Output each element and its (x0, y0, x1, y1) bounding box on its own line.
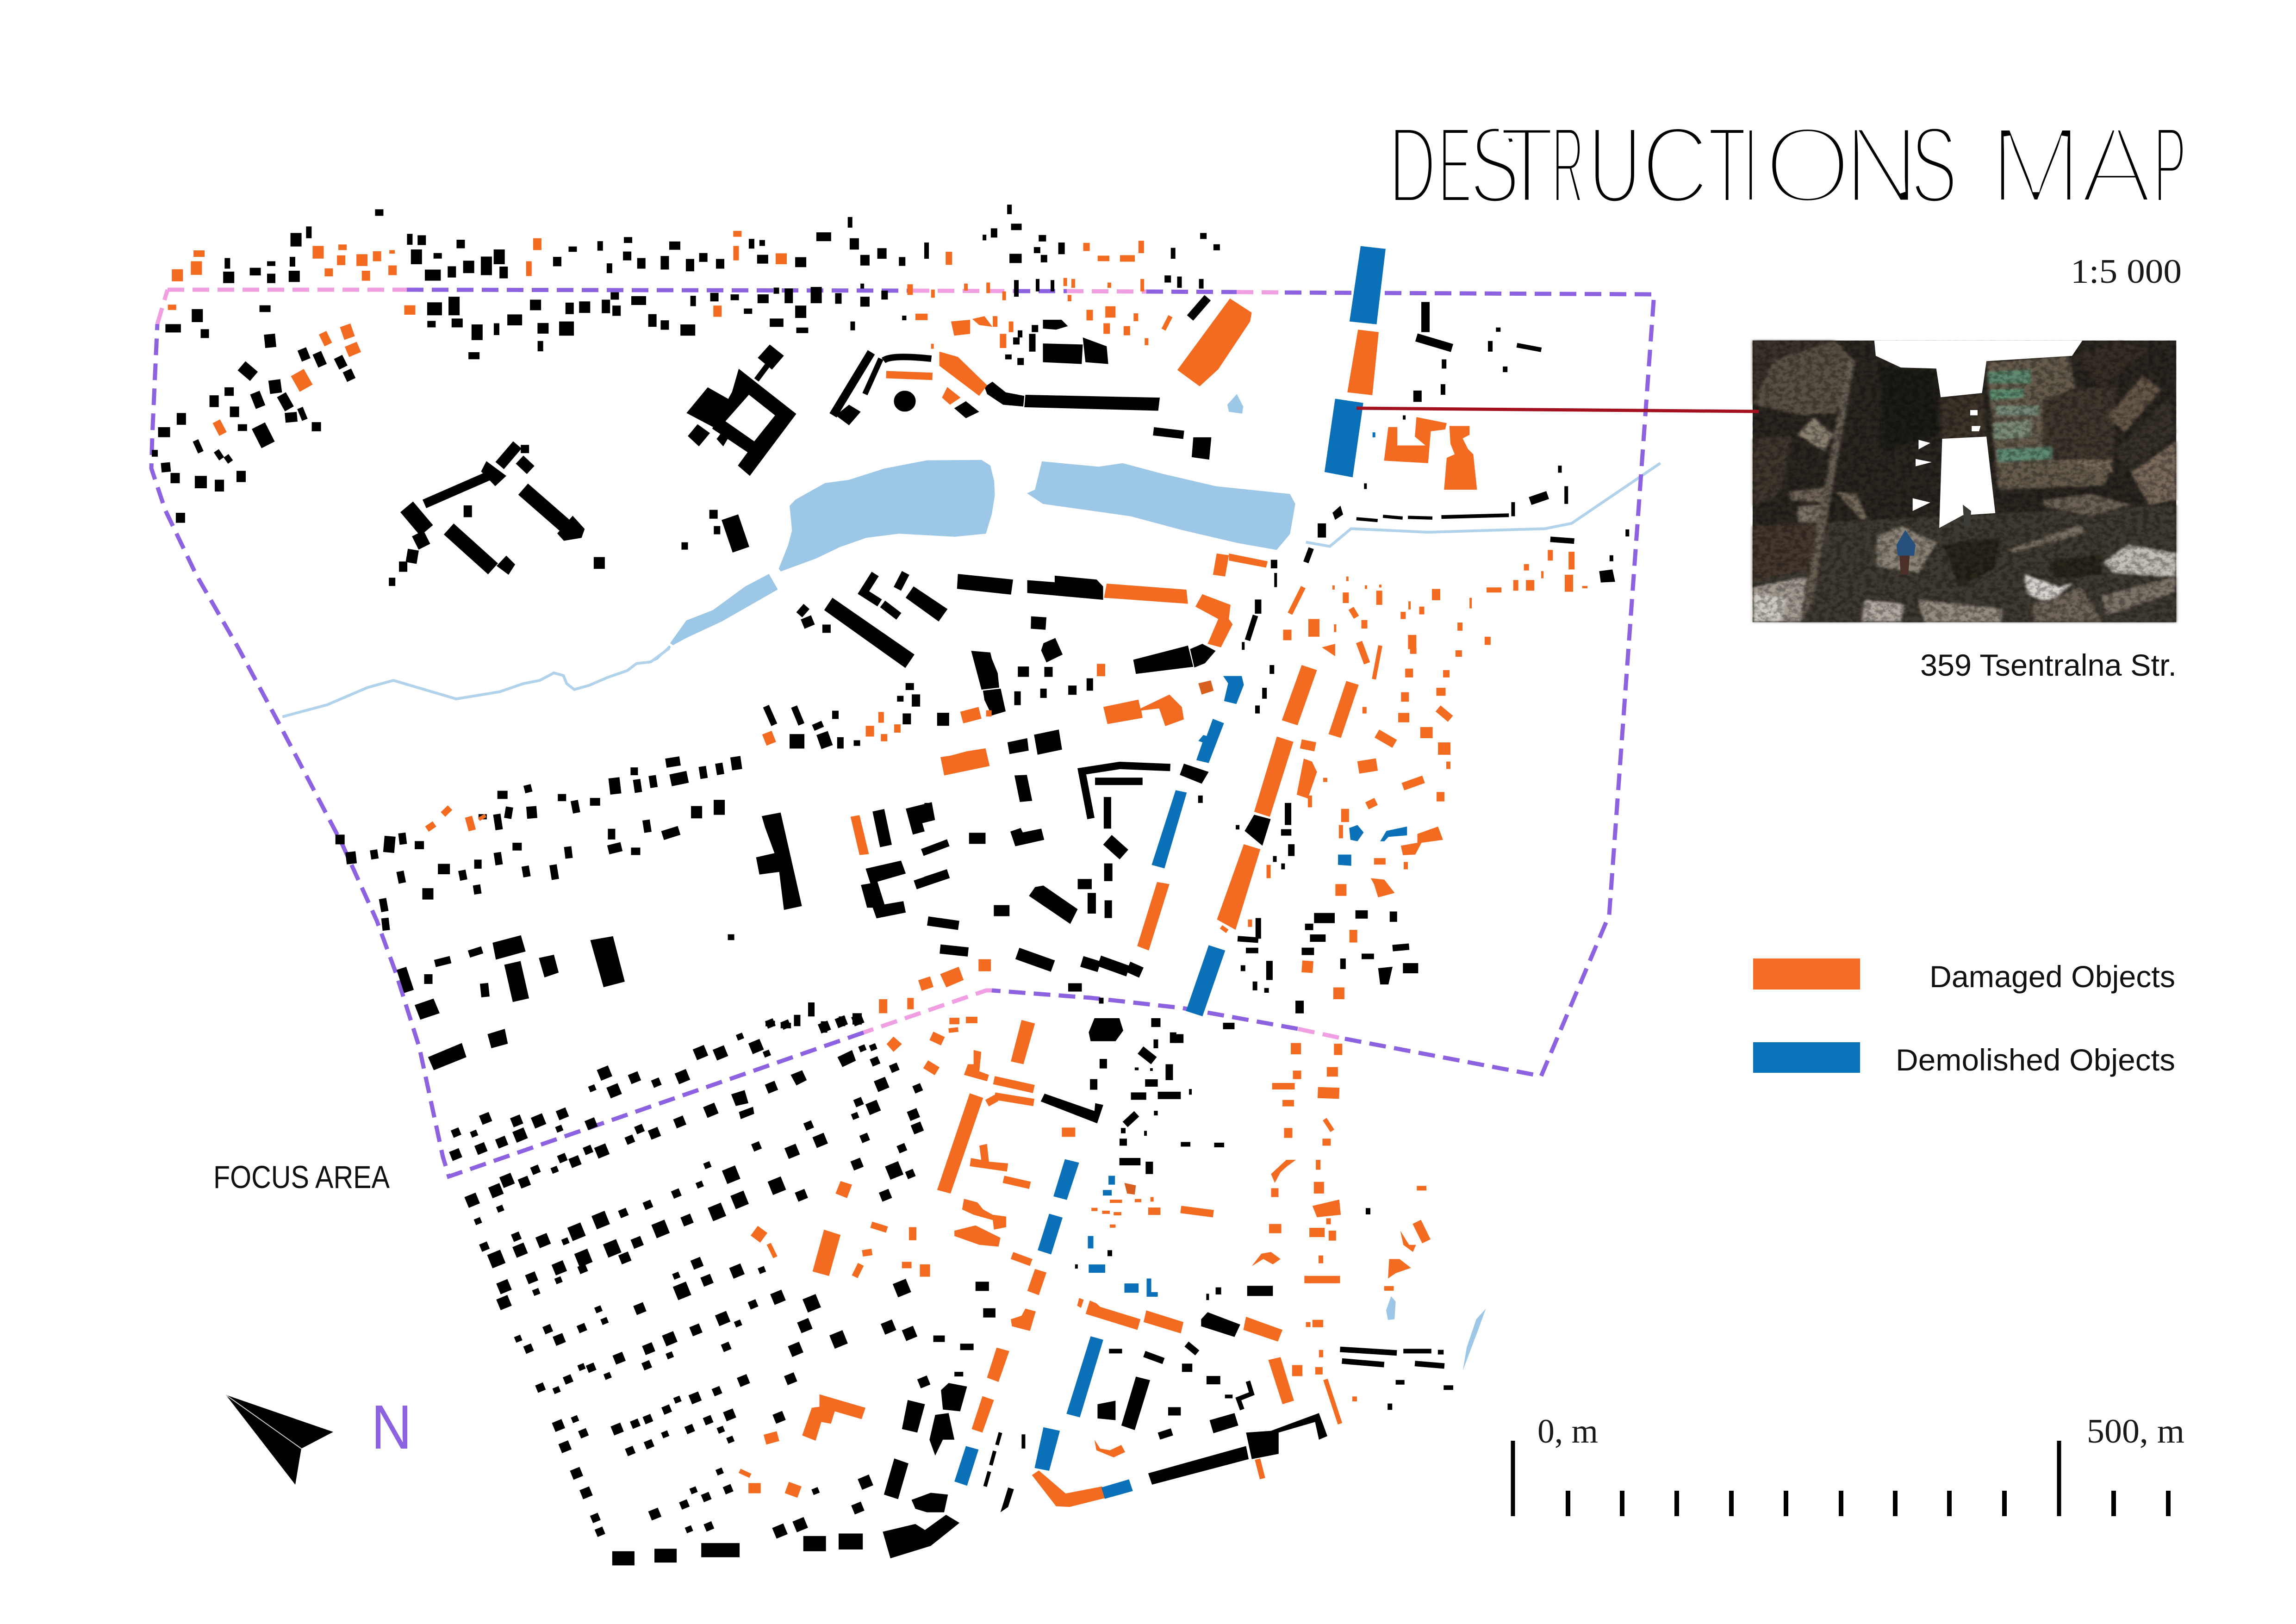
large orange blocks (940, 299, 1477, 656)
buildings: south-west of centre (340, 757, 948, 1033)
black houses north (838, 205, 1541, 402)
black houses: small (471, 1035, 876, 1531)
title: T (1499, 104, 1555, 226)
orange houses (427, 808, 932, 1013)
black blocks (766, 573, 1103, 755)
title: C (1641, 104, 1709, 226)
damaged houses (926, 1020, 1426, 1479)
church complex (392, 445, 741, 586)
north label: N (371, 1392, 412, 1462)
legend label: demolished: Demolished Objects (1896, 1043, 2175, 1077)
orange houses (767, 664, 1101, 744)
hospital complex (686, 344, 796, 476)
scale bar (1513, 1412, 2184, 1516)
water: lakes and river (282, 394, 1660, 1370)
damaged houses (978, 648, 1459, 999)
title: D (1388, 104, 1437, 226)
title: R (1552, 104, 1584, 226)
title: P (2153, 104, 2186, 226)
black houses (340, 757, 948, 1033)
legend swatch: demolished (1753, 1042, 1860, 1073)
black houses north row (165, 209, 824, 359)
leader line from building to photo (1356, 408, 1759, 411)
black houses: medium-small (452, 1022, 921, 1533)
buildings: southern residential blocks (428, 1018, 959, 1565)
title: A (2080, 104, 2152, 226)
orange houses north row (172, 231, 781, 434)
orange scatter east (1288, 550, 1587, 679)
scale label: zero: 0, m (1537, 1412, 1598, 1450)
legend swatch: damaged (1753, 958, 1860, 989)
title: O (1763, 104, 1852, 226)
title (1388, 110, 2180, 220)
legend label: damaged: Damaged Objects (1929, 959, 2175, 994)
orange houses (740, 1037, 925, 1492)
black houses: medium (451, 1018, 928, 1516)
black row along the east river (1133, 415, 1627, 674)
damaged blocks (940, 665, 1443, 987)
damaged blocks (937, 1020, 1416, 1507)
title: S (1910, 104, 1958, 226)
title: M (1989, 104, 2083, 226)
black blocks (926, 665, 1418, 1014)
title: U (1588, 104, 1642, 226)
title: I (1742, 104, 1760, 226)
buildings: north-centre and east (833, 205, 1627, 679)
black houses west cluster (155, 349, 351, 523)
buildings: centre along the main avenue (926, 648, 1459, 1016)
orange slab (851, 815, 869, 855)
orange houses north (886, 241, 1170, 376)
black long blocks by park (833, 320, 1211, 460)
buildings: north-west blocks (155, 209, 824, 586)
legend (1753, 958, 2175, 1077)
focus area label: FOCUS AREA (213, 1159, 390, 1195)
icon: north arrow (226, 1395, 333, 1485)
title: S (1469, 104, 1520, 226)
focus area boundary (151, 290, 1654, 1176)
buildings: south-east along the avenue (926, 1018, 1453, 1512)
photo: destroyed building at 359 Tsentralna Str. (1753, 341, 2176, 622)
black houses: large (490, 1168, 908, 1342)
black blocks (428, 1029, 959, 1565)
photo caption: 359 Tsentralna Str. (1920, 648, 2177, 682)
demolished blocks (954, 1159, 1158, 1499)
demolished blocks (1151, 676, 1407, 1016)
buildings: river south banks (766, 573, 1103, 755)
black blocks (415, 802, 935, 1020)
scale label: five hundred: 500, m (2087, 1412, 2184, 1450)
demolished and damaged blocks, east of the ponds (1325, 246, 1386, 477)
title: N (1843, 104, 1919, 226)
title: T (1708, 104, 1747, 226)
black blocks (929, 1018, 1453, 1512)
black houses: medium-large (467, 1044, 915, 1533)
scale ratio: 1:5 000 (2071, 253, 2182, 291)
title: E (1438, 104, 1472, 226)
